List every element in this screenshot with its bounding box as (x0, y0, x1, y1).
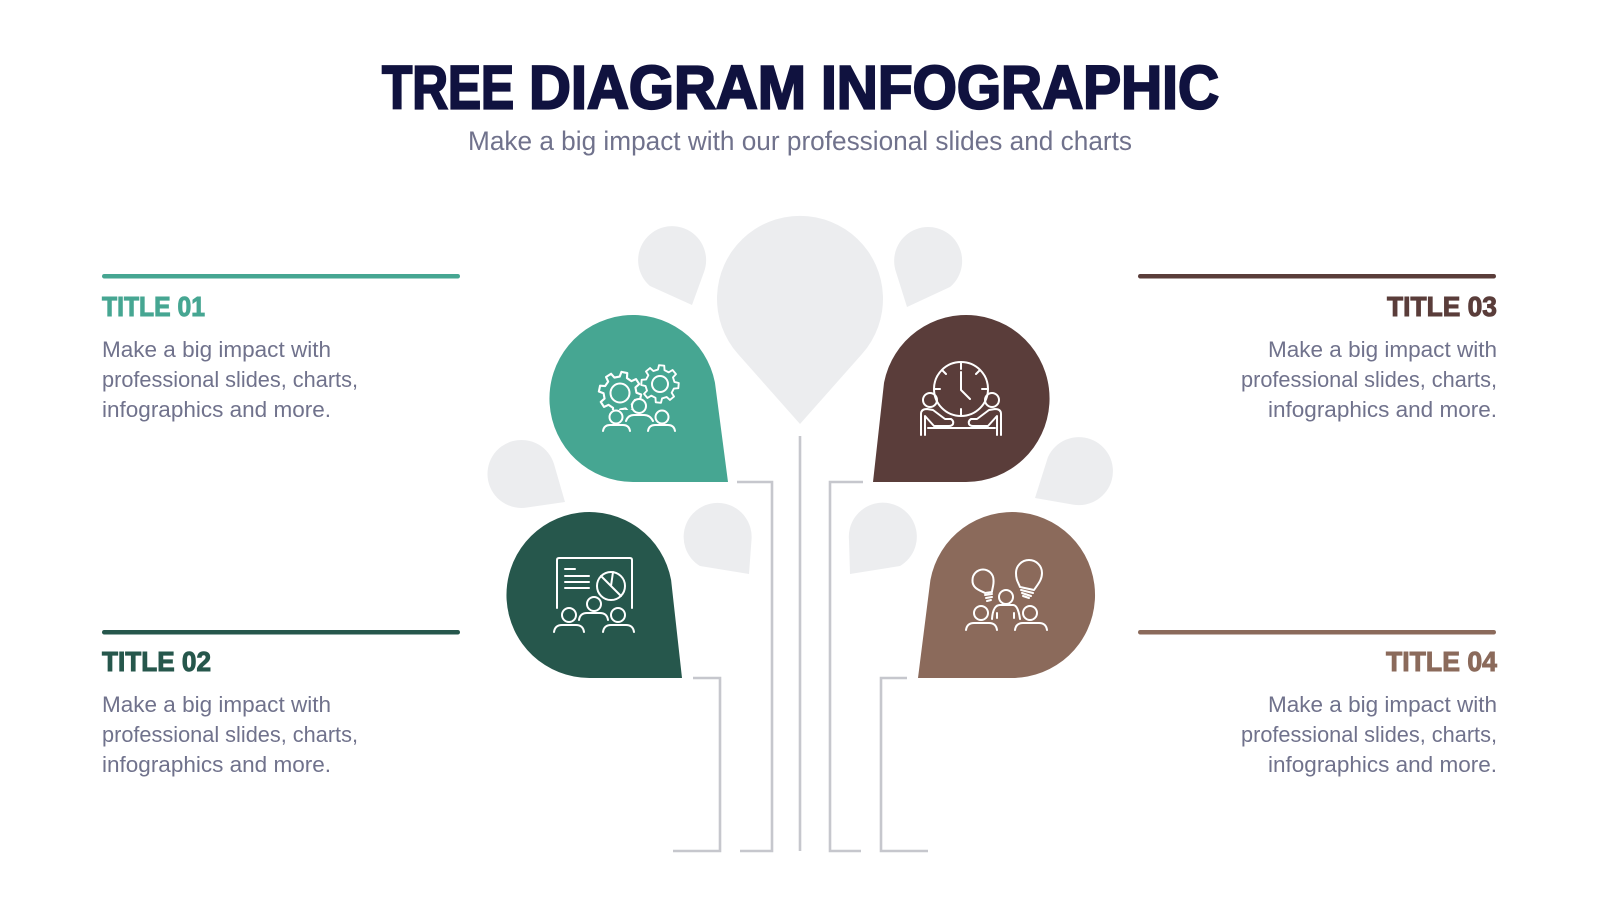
title: TREE (382, 54, 514, 122)
small drop lower right (849, 503, 917, 574)
icon: presentation board and audience (554, 558, 634, 632)
panel: title 01 (102, 274, 460, 422)
small drop middle right (1035, 437, 1113, 505)
tree trunk and branch lines (673, 436, 928, 851)
body text (102, 692, 358, 777)
body text: infographics and more. (102, 752, 331, 777)
body text: infographics and more. (1268, 397, 1497, 422)
accent bar (102, 630, 460, 634)
big centre drop (717, 216, 883, 424)
body text: infographics and more. (1268, 752, 1497, 777)
body text: infographics and more. (102, 397, 331, 422)
body text: professional slides, charts, (102, 722, 358, 747)
small drop top left (638, 226, 706, 305)
body text: Make a big impact with (102, 337, 331, 362)
title (382, 54, 1219, 122)
accent bar (102, 274, 460, 278)
heading: TITLE 04 (1386, 646, 1497, 677)
subtitle: Make a big impact with our professional slides and charts (468, 126, 1132, 156)
drop: dark green with presentation icon (506, 512, 682, 678)
accent bar (1138, 274, 1496, 278)
body text: Make a big impact with (1268, 337, 1497, 362)
body text: Make a big impact with (102, 692, 331, 717)
drop: light brown with lightbulb team icon (918, 512, 1095, 678)
body text: professional slides, charts, (102, 367, 358, 392)
title: INFOGRAPHIC (821, 54, 1219, 122)
accent bar (1138, 630, 1496, 634)
small drop top right (894, 227, 962, 307)
body text: professional slides, charts, (1241, 722, 1497, 747)
icon: gears and team (595, 364, 680, 432)
heading: TITLE 03 (1387, 291, 1497, 322)
body text: professional slides, charts, (1241, 367, 1497, 392)
drop: dark brown with clock meeting icon (873, 315, 1050, 482)
panel: title 02 (102, 630, 460, 777)
tree canopy: grey background drops (487, 216, 1113, 574)
icon: lightbulbs and team (966, 560, 1047, 630)
heading: TITLE 01 (102, 291, 205, 322)
icon: clock and two people at a table (921, 362, 1001, 435)
body text (102, 337, 358, 422)
panel: title 04 (1138, 630, 1497, 777)
drop: teal with gears and team icon (549, 315, 728, 482)
body text: Make a big impact with (1268, 692, 1497, 717)
small drop lower left (684, 503, 752, 574)
heading: TITLE 02 (102, 646, 211, 677)
title: DIAGRAM (529, 54, 806, 122)
body text (1241, 337, 1497, 422)
body text (1241, 692, 1497, 777)
panel: title 03 (1138, 274, 1497, 422)
small drop middle left (487, 440, 565, 508)
